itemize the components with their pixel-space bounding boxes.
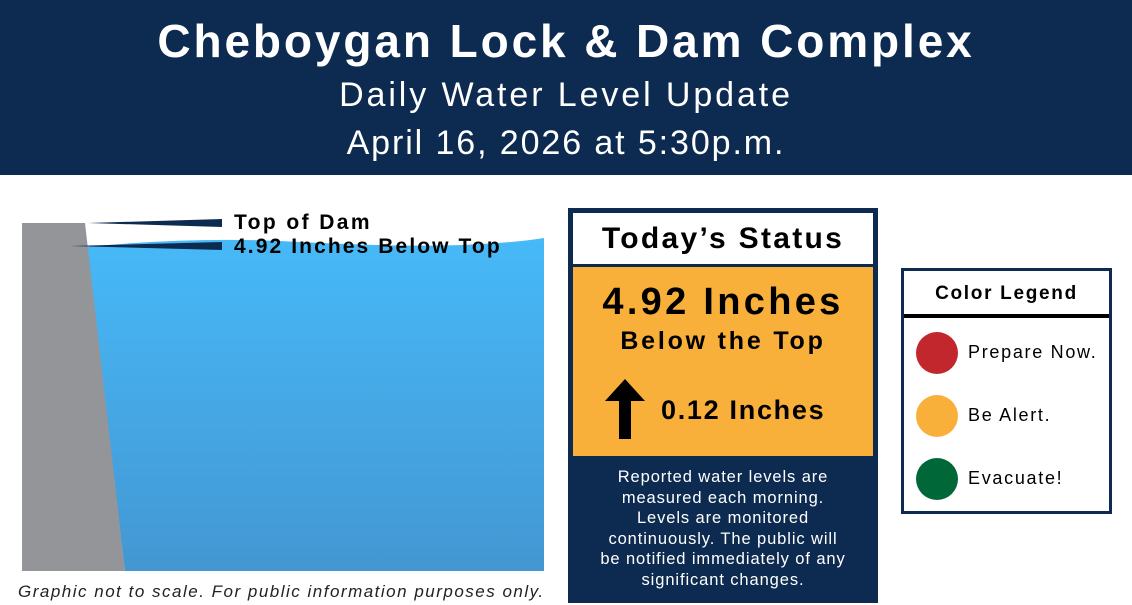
note text <box>600 468 846 588</box>
header <box>0 0 1132 175</box>
legend: green <box>916 458 1063 500</box>
panel: color legend <box>901 268 1112 514</box>
status heading: Today’s Status <box>602 222 844 255</box>
icon: up arrow <box>605 379 645 439</box>
water <box>85 238 544 571</box>
change value: 0.12 Inches <box>661 395 825 425</box>
legend: orange <box>916 395 1051 437</box>
note text: Reported water levels are <box>618 468 828 486</box>
status box <box>573 267 873 456</box>
date: April 16, 2026 at 5:30p.m. <box>347 124 785 162</box>
level value: 4.92 Inches <box>602 281 844 323</box>
legend: red: Prepare Now. <box>968 342 1097 362</box>
legend: orange: Be Alert. <box>968 405 1051 425</box>
note text: measured each morning. <box>622 488 824 506</box>
note text: be notified immediately of any <box>600 550 846 568</box>
label: top of dam: Top of Dam <box>234 211 372 234</box>
caption: Graphic not to scale. For public information purposes only. <box>18 582 545 601</box>
title: Cheboygan Lock & Dam Complex <box>157 15 975 67</box>
subtitle: Daily Water Level Update <box>339 76 793 114</box>
legend heading: Color Legend <box>935 283 1078 304</box>
status heading <box>573 213 873 264</box>
legend: green: Evacuate! <box>968 468 1063 488</box>
pointer: water level <box>70 242 222 250</box>
note text: continuously. The public will <box>608 530 838 548</box>
label: level: 4.92 Inches Below Top <box>234 235 502 258</box>
legend heading <box>904 271 1109 318</box>
note text: Levels are monitored <box>637 509 809 527</box>
dam diagram <box>22 211 544 571</box>
legend: red <box>916 332 1097 374</box>
pointer: top of dam <box>88 219 222 227</box>
panel: today's status <box>568 208 878 603</box>
below the top: Below the Top <box>620 327 826 355</box>
note text: significant changes. <box>642 570 804 588</box>
dam wall <box>22 223 125 571</box>
